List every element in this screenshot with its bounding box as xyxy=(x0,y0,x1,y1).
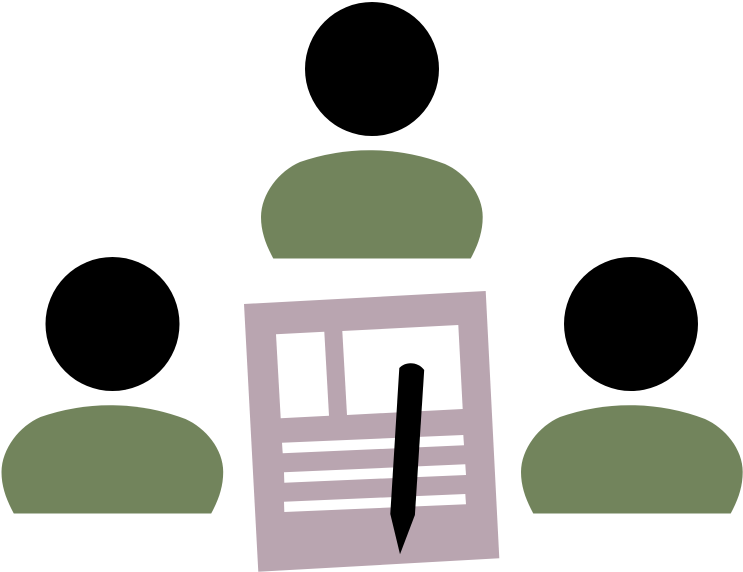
text line 2 xyxy=(284,464,466,483)
icon: pencil xyxy=(390,363,424,554)
image block: right xyxy=(342,325,463,415)
body: left person xyxy=(2,405,223,514)
body: right person xyxy=(521,405,743,514)
text line 3 xyxy=(284,494,466,512)
document page xyxy=(244,291,499,572)
image block: left xyxy=(276,332,329,418)
document xyxy=(244,291,499,572)
text line 1 xyxy=(282,435,464,453)
person: left xyxy=(2,257,223,514)
person: top xyxy=(261,2,483,258)
head: top person xyxy=(305,2,439,136)
person: right xyxy=(521,257,743,514)
head: left person xyxy=(46,257,180,391)
body: top person xyxy=(261,150,483,258)
head: right person xyxy=(564,257,698,391)
